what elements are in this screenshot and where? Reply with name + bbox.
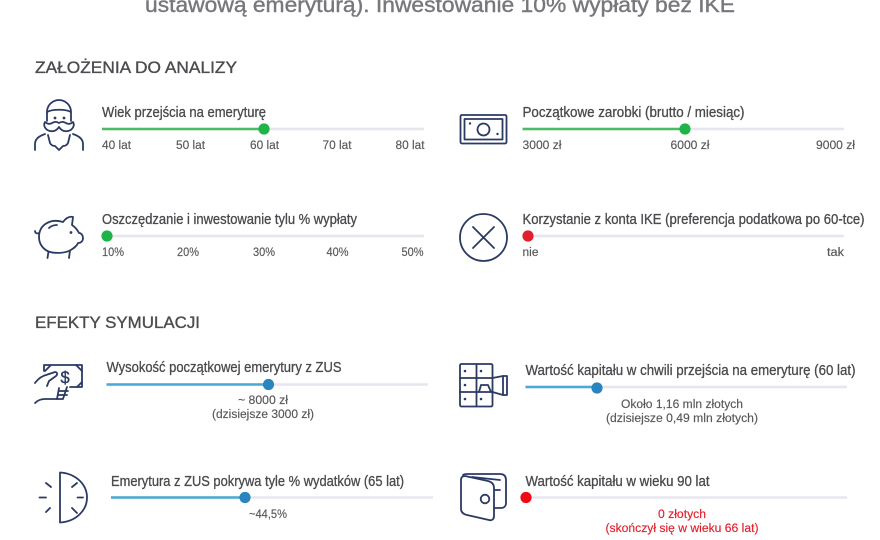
panel: capital at 90	[461, 474, 847, 535]
icon: safe deposit boxes	[460, 364, 507, 406]
slider label: Oszczędzanie i inwestowanie tylu % wypłaty	[102, 212, 358, 228]
value	[606, 509, 759, 535]
panel: initial pension	[35, 360, 428, 421]
value: ~44,5%	[249, 509, 287, 521]
value	[606, 399, 758, 425]
slider scale: 50%	[402, 247, 424, 259]
icon: wallet	[461, 474, 506, 520]
slider scale: 30%	[253, 247, 275, 259]
slider scale	[522, 140, 855, 152]
heading: effects: EFEKTY SYMULACJI	[35, 313, 200, 332]
slider scale	[102, 140, 425, 152]
slider	[522, 230, 844, 242]
icon: bearded man	[35, 100, 83, 150]
slider	[102, 123, 424, 135]
icon: hand with money: $	[60, 369, 70, 387]
icon: half clock	[40, 472, 87, 522]
slider label: Emerytura z ZUS pokrywa tyle % wydatków (65 lat)	[111, 474, 404, 490]
slider	[526, 382, 847, 394]
slider scale	[522, 247, 844, 259]
panel: starting salary	[460, 105, 855, 152]
panel: IKE account	[460, 212, 864, 261]
value: 0 złotych	[658, 509, 706, 521]
slider label: Wartość kapitału w wieku 90 lat	[526, 474, 710, 490]
slider	[522, 123, 844, 135]
panel: savings rate	[35, 212, 424, 259]
slider scale	[102, 247, 424, 259]
slider scale: tak	[827, 247, 844, 259]
slider scale: 10%	[102, 247, 124, 259]
value: ~ 8000 zł	[238, 395, 288, 407]
panel: pension coverage	[40, 472, 433, 522]
slider scale: 20%	[177, 247, 199, 259]
icon: crossed circle	[460, 214, 507, 261]
value	[212, 395, 314, 421]
slider label: Wiek przejścia na emeryturę	[102, 105, 266, 121]
slider label: Wysokość początkowej emerytury z ZUS	[106, 360, 342, 376]
icon: hand with money	[35, 365, 82, 403]
slider scale: 3000 zł	[522, 140, 562, 152]
value: Około 1,16 mln złotych	[621, 399, 743, 411]
slider scale: 70 lat	[322, 140, 352, 152]
slider scale: 60 lat	[250, 140, 280, 152]
slider	[101, 230, 424, 242]
slider label: Wartość kapitału w chwili przejścia na emeryturę (60 lat)	[526, 363, 856, 379]
heading: assumptions: ZAŁOŻENIA DO ANALIZY	[35, 58, 237, 77]
slider scale: 40%	[326, 247, 348, 259]
panel: retirement age	[35, 100, 425, 152]
value: (dzisiejsze 0,49 mln złotych)	[606, 413, 758, 425]
slider scale: 50 lat	[176, 140, 206, 152]
panel: capital at retirement	[460, 363, 856, 425]
slider	[111, 492, 433, 503]
slider scale: 6000 zł	[670, 140, 710, 152]
slider scale: 40 lat	[102, 140, 132, 152]
slider label: Początkowe zarobki (brutto / miesiąc)	[522, 105, 744, 121]
icon: banknote	[460, 115, 506, 144]
icon: piggy bank	[35, 217, 83, 258]
value: (skończył się w wieku 66 lat)	[606, 523, 759, 535]
slider scale: 80 lat	[396, 140, 425, 152]
slider	[520, 492, 847, 503]
value: (dzisiejsze 3000 zł)	[212, 409, 314, 421]
slider scale: 9000 zł	[816, 140, 855, 152]
slider scale: nie	[522, 247, 538, 259]
slider	[106, 379, 428, 390]
